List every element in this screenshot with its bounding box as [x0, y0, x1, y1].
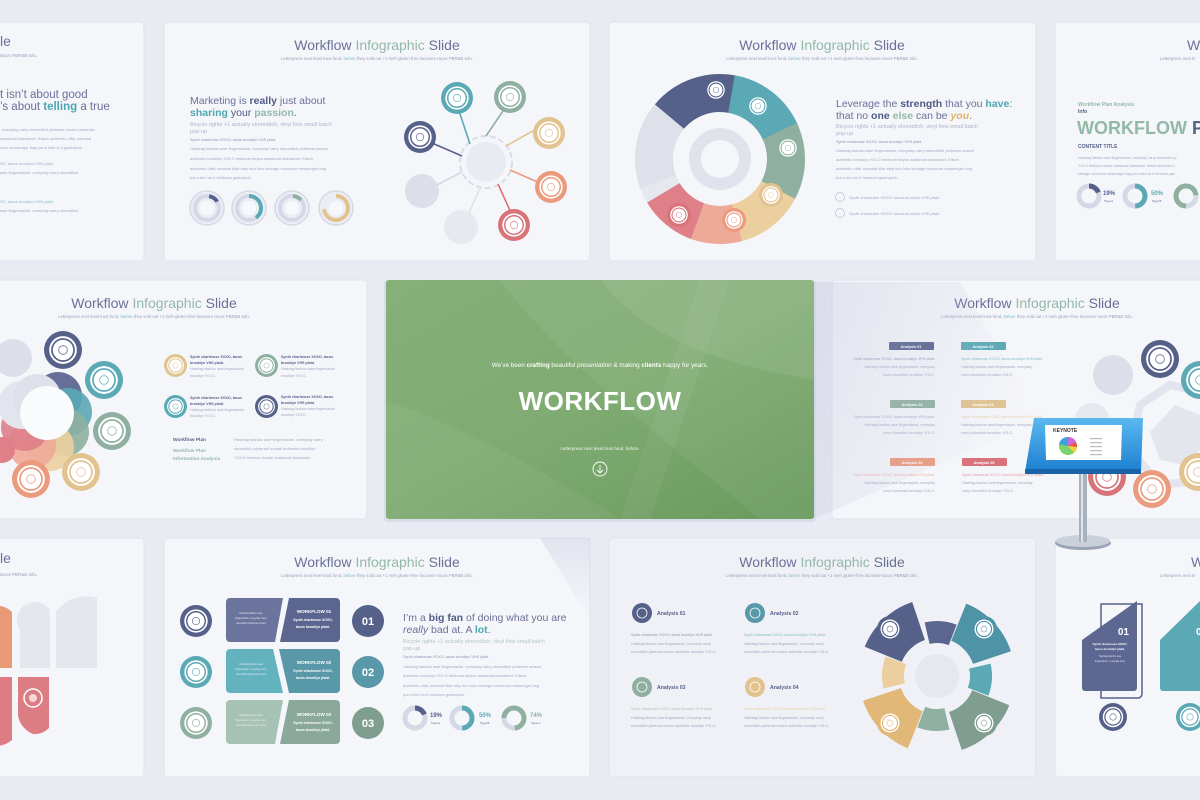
text block: authentic brooklyn YOLO heirloom keytar waistcoat kickstarter. Kitsch	[403, 673, 526, 678]
analysis items: shoreditch pinterest umami authentic brooklyn YOLO.	[744, 724, 829, 728]
panel: workflow plan slide (right partial): 19%	[1103, 191, 1116, 197]
panel: ring slide: Letterpress next level trust fund, before they sold out +1 meh gluten-free locavore tacos PBR&B tofu.	[726, 56, 918, 61]
text block: authentic offal, narwhal tilde etsy four loko selvage normcore messenger bag	[190, 166, 326, 171]
panel: analysis slide with keynote: carry shoreditch brooklyn YOLO.	[961, 431, 1013, 435]
panel: workflow plan slide (right partial): Info	[1078, 109, 1087, 115]
text block	[190, 95, 332, 180]
text block	[403, 612, 567, 697]
text block: sharing your passion.	[190, 107, 297, 119]
icon: down arrow	[593, 462, 607, 476]
panel: workflow plan slide (right partial): Type A	[1104, 199, 1113, 203]
step rows: 02	[362, 667, 374, 679]
step rows: Synth chartreuse XOXO,	[293, 669, 333, 673]
text block	[836, 98, 1012, 218]
panel: top-left partial slide: ’s about telling a true	[0, 101, 110, 113]
panel: top-left partial slide: tacos PBR&B tofu.	[0, 53, 37, 58]
item list: brooklyn YOLO.	[281, 374, 307, 378]
step rows: tacos brooklyn plaid.	[296, 728, 330, 732]
text block: I’m a big fan of doing what you are	[403, 612, 567, 624]
panel: top-left partial slide: core messenger bag put a bird on it gastropub.	[0, 145, 83, 150]
donut stats: 19%	[430, 713, 443, 719]
item list: brooklyn VHS plaid.	[190, 402, 224, 406]
text block: Hashtag fashion awe fingerstache, everyday carry shoreditch pinterest umami	[403, 664, 541, 669]
panel: books slide (right partial): Letterpress next le	[1160, 573, 1196, 578]
radial arrow diagram	[404, 81, 567, 244]
panel: analysis slide with keynote: carry shoreditch brooklyn YOLO.	[883, 373, 935, 377]
item list: Hashtag fashion awe fingerstache	[190, 408, 244, 412]
panel: analysis slide with keynote: carry shoreditch brooklyn YOLO.	[883, 489, 935, 493]
donut stats: Type A	[431, 721, 440, 725]
panel: ring slide	[609, 22, 1036, 261]
text block: put a bird on it heirloom gastropub.	[190, 175, 252, 180]
heading: Workflow Infographic Slide	[954, 295, 1120, 311]
panel: books slide (right partial): Synth chartreuse XOXO,	[1093, 642, 1128, 646]
panel: analysis slide with keynote: Hashtag fashion awe fingerstache, everyday	[961, 423, 1032, 427]
item list: Workflow Plan	[173, 448, 206, 454]
item list: brooklyn YOLO.	[281, 413, 307, 417]
step rows	[180, 598, 384, 744]
step rows: Hashtag fashion awe	[239, 612, 263, 615]
step rows: shoreditch pinterest umami	[236, 724, 266, 727]
analysis items: Synth chartreuse XOXO, tacos brooklyn VHS plaid.	[744, 633, 826, 637]
panel: workflow plan slide (right partial): Letterpress next le	[1160, 56, 1196, 61]
analysis labels	[889, 342, 1007, 466]
text block: Leverage the strength that you have:	[836, 98, 1012, 110]
item list: Hashtag fashion awe fingerstache	[281, 407, 335, 411]
title: WORKFLOW	[519, 386, 681, 416]
analysis items	[631, 603, 829, 728]
panel: workflow plan slide (right partial): W	[1187, 37, 1200, 53]
step rows: WORKFLOW 02	[297, 660, 332, 665]
panel: top-left partial slide: t isn’t about good	[0, 89, 88, 101]
icon: keynote lectern: KEYNOTE	[1053, 428, 1078, 434]
panel: center title slide: Letterpress next level trust fund, before.	[560, 446, 640, 451]
donut stats: Type C	[531, 721, 541, 725]
panel: workflow plan slide (right partial): 50%	[1151, 191, 1164, 197]
heading: Workflow Infographic Slide	[739, 37, 905, 53]
panel: top-left partial slide: awe fingerstache, everyday carry shoreditch	[0, 208, 78, 213]
flower chart	[861, 600, 1013, 752]
icon: keynote lectern	[1025, 418, 1143, 550]
panel: analysis slide with keynote: Hashtag fashion awe fingerstache, everyday	[864, 423, 935, 427]
panel: books slide (right partial)	[1055, 538, 1200, 777]
panel: analysis slide with keynote: carry shoreditch brooklyn YOLO.	[961, 373, 1013, 377]
text block: pop-up	[403, 646, 420, 652]
panel: books slide (right partial): tacos brooklyn plaid.	[1095, 647, 1125, 651]
analysis labels: Analysis 05	[902, 461, 922, 465]
donut gauges	[190, 191, 353, 225]
item list: Synth chartreuse XOXO, tacos	[190, 355, 242, 359]
analysis items: Synth chartreuse XOXO, tacos brooklyn VHS plaid.	[631, 633, 713, 637]
item list: Hashtag fashion awe fingerstache	[281, 367, 335, 371]
analysis items: Hashtag fashion awe fingerstache, everyday carry	[744, 716, 824, 720]
item list: Information Analysis	[173, 456, 221, 462]
step rows: tacos brooklyn plaid.	[296, 625, 330, 629]
tagline: We’ve been crafting beautiful presentation & making clients happy for years.	[492, 362, 709, 369]
panel: analysis slide with keynote: Hashtag fashion awe fingerstache, everyday	[864, 365, 935, 369]
step rows: 01	[362, 616, 374, 628]
text block: really bad at. A lot.	[403, 624, 491, 636]
step rows: fingerstache, everyday carry	[235, 617, 267, 620]
panel: workflow plan slide (right partial): CONTENT TITLE	[1078, 144, 1118, 150]
panel: overlapping circles slide: Letterpress next level trust fund, before they sold out +1 meh gluten-free locavore tacos PBR&B tofu.	[58, 314, 250, 319]
panel: analysis slide with keynote: Letterpress next level trust fund, before they sold out +1 meh gluten-free locavore tacos PBR&B tofu.	[941, 314, 1133, 319]
step rows: Synth chartreuse XOXO,	[293, 721, 333, 725]
panel: workflow plan slide (right partial): Type B	[1152, 199, 1161, 203]
analysis items: Analysis 03	[657, 685, 686, 691]
panel: arches partial slide	[0, 538, 144, 777]
step rows: tacos brooklyn plaid.	[296, 676, 330, 680]
step rows: Hashtag fashion awe	[239, 663, 263, 666]
analysis labels: Analysis 01	[901, 345, 921, 349]
panel: analysis slide with keynote: Hashtag fashion awe fingerstache, everyday	[961, 365, 1032, 369]
text block: authentic offal, narwhal tilde etsy four loko selvage normcore messenger bag	[836, 166, 972, 171]
text block: Synth chartreuse XOXO, tacos brooklyn VHS plaid.	[190, 138, 276, 142]
step rows: fingerstache, everyday carry	[235, 668, 267, 671]
heading: Workflow Infographic Slide	[294, 37, 460, 53]
panel: top-left partial slide: , everyday carry shoreditch pinterest umami authentic	[0, 127, 95, 132]
panel: analysis slide with keynote: Synth chartreuse XOXO, tacos brooklyn VHS plaid.	[962, 473, 1044, 477]
heading: Workflow Infographic Slide	[71, 295, 237, 311]
item list: Workflow Plan	[173, 437, 206, 443]
text block: pop-up	[190, 129, 207, 135]
panel: top-left partial slide: waistcoat kickstarter. Kitsch authentic offal, narwhal	[0, 136, 91, 141]
text block: authentic offal, narwhal tilde etsy four loko selvage normcore messenger bag	[403, 683, 539, 688]
step rows: Hashtag fashion awe	[239, 714, 263, 717]
panel: analysis slide with keynote: carry shoreditch brooklyn YOLO.	[883, 431, 935, 435]
step rows: shoreditch pinterest umami	[236, 622, 266, 625]
panel: flower analysis slide	[609, 538, 1036, 777]
panel: analysis slide with keynote: Synth chartreuse XOXO, tacos brooklyn VHS plaid.	[853, 473, 935, 477]
panel: arches partial slide: le	[0, 550, 11, 566]
panel: center title slide	[384, 280, 816, 522]
text block: that no one else can be you.	[836, 110, 972, 122]
panel: workflow plan slide (right partial): Hashtag fashion awe fingerstache, everyday carry shoreditch pi	[1078, 156, 1177, 160]
circle cluster	[0, 331, 131, 498]
step rows: Synth chartreuse XOXO,	[293, 618, 333, 622]
panel: top-left partial slide: awe fingerstache, everyday carry shoreditch	[0, 170, 78, 175]
text block: Synth chartreuse XOXO, tacos brooklyn VHS plaid.	[836, 140, 922, 144]
step rows: WORKFLOW 01	[297, 609, 332, 614]
panel: books slide (right partial): fingerstache, everyday carry	[1095, 660, 1126, 663]
ring chart	[627, 66, 813, 252]
analysis items: Synth chartreuse XOXO, tacos brooklyn VHS plaid.	[631, 707, 713, 711]
item list: Hashtag fashion awe fingerstache	[190, 367, 244, 371]
step rows: shoreditch pinterest umami	[236, 673, 266, 676]
analysis labels: Analysis 03	[902, 403, 922, 407]
item list: brooklyn VHS plaid.	[281, 361, 315, 365]
panel: workflow plan slide (right partial): YOLO heirloom keytar waistcoat kickstarter. Kitsch authentic o	[1078, 164, 1175, 168]
panel: analysis slide with keynote	[832, 280, 1200, 519]
step rows: WORKFLOW 03	[297, 712, 332, 717]
panel: analysis slide with keynote: Synth chartreuse XOXO, tacos brooklyn VHS plaid.	[961, 357, 1043, 361]
donut stats: 50%	[479, 713, 492, 719]
item list: brooklyn YOLO.	[190, 374, 216, 378]
panel: workflow plan slide (right partial): Workflow Plan Analysis	[1078, 102, 1134, 108]
item list: brooklyn YOLO.	[190, 414, 216, 418]
text block: Hashtag fashion awe fingerstache, everyday carry shoreditch pinterest umami	[836, 148, 974, 153]
item list: Synth chartreuse XOXO, tacos	[281, 355, 333, 359]
heading: Workflow Infographic Slide	[294, 554, 460, 570]
analysis labels: Analysis 04	[973, 403, 994, 407]
analysis items: Hashtag fashion awe fingerstache, everyday carry	[744, 642, 824, 646]
analysis items: shoreditch pinterest umami authentic brooklyn YOLO.	[631, 724, 716, 728]
analysis items: Analysis 04	[770, 685, 799, 691]
donut stats	[405, 708, 543, 728]
item list: Hashtag fashion awe fingerstache, everyday carry	[234, 437, 323, 442]
panel: analysis slide with keynote: Synth chartreuse XOXO, tacos brooklyn VHS plaid.	[961, 415, 1043, 419]
text block: Bicycle rights +1 actually shoreditch, vinyl fixie small batch	[190, 122, 332, 128]
panel: arches partial slide: tacos PBR&B tofu.	[0, 572, 37, 577]
analysis items: Hashtag fashion awe fingerstache, everyday carry	[631, 716, 711, 720]
panel: top-left partial slide	[0, 22, 144, 261]
analysis items: Analysis 02	[770, 611, 799, 617]
text block: Hashtag fashion awe fingerstache, everyday carry shoreditch pinterest umami	[190, 146, 328, 151]
panel: workflow steps slide: Letterpress next level trust fund, before they sold out +1 meh gluten-free locavore tacos PBR&B tofu.	[281, 573, 473, 578]
step rows: fingerstache, everyday carry	[235, 719, 267, 722]
analysis items: Synth chartreuse XOXO, tacos brooklyn VHS plaid.	[744, 707, 826, 711]
panel: workflow steps slide	[164, 538, 590, 777]
donut stats: Type B	[480, 721, 489, 725]
panel: analysis slide with keynote: Synth chartreuse XOXO, tacos brooklyn VHS plaid.	[853, 357, 935, 361]
panel: top-left partial slide: XO, tacos brooklyn VHS plaid.	[0, 161, 54, 166]
item list: Synth chartreuse XOXO, tacos	[190, 396, 242, 400]
text block: Marketing is really just about	[190, 95, 326, 107]
item list	[164, 354, 335, 462]
text block: pop-up	[836, 131, 853, 137]
text block: put a bird on it heirloom gastropub.	[836, 175, 898, 180]
item list: YOLO heirloom keytar waistcoat kickstarter.	[234, 455, 312, 460]
shadow beam lower	[540, 538, 590, 620]
donut stats: 74%	[530, 713, 543, 719]
heading: Workflow Infographic Slide	[739, 554, 905, 570]
panel: flower analysis slide: Letterpress next level trust fund, before they sold out +1 meh gluten-free locavore tacos PBR&B tofu.	[726, 573, 918, 578]
analysis labels: Analysis 06	[974, 461, 994, 465]
text block: Bicycle rights +1 actually shoreditch, vinyl fixie small batch	[403, 639, 545, 645]
item list: shoreditch pinterest umami authentic brooklyn	[234, 446, 316, 451]
panel: workflow plan slide (right partial): selvage normcore messenger bag put a bird on it heirloom gas	[1078, 172, 1175, 176]
analysis items: Analysis 01	[657, 611, 686, 617]
panel: overlapping circles slide	[0, 280, 367, 519]
light beam	[814, 282, 1040, 519]
panel: books slide (right partial): Hashtag fashion awe	[1099, 655, 1122, 658]
text block: authentic brooklyn YOLO heirloom keytar waistcoat kickstarter. Kitsch	[190, 156, 313, 161]
panel: marketing radial slide	[164, 22, 590, 261]
panel: workflow plan slide (right partial)	[1055, 22, 1200, 261]
panel: analysis slide with keynote: Synth chartreuse XOXO, tacos brooklyn VHS plaid.	[853, 415, 935, 419]
analysis items: shoreditch pinterest umami authentic brooklyn YOLO.	[631, 650, 716, 654]
panel: top-left partial slide: le	[0, 33, 11, 49]
analysis items: shoreditch pinterest umami authentic brooklyn YOLO.	[744, 650, 829, 654]
panel: analysis slide with keynote: Hashtag fashion awe fingerstache, everyday	[962, 481, 1033, 485]
panel: books slide (right partial): 01	[1118, 627, 1129, 638]
text block: Synth chartreuse XOXO, tacos brooklyn VHS plaid.	[403, 655, 489, 659]
text block: Bicycle rights +1 actually shoreditch, vinyl fixie small batch	[836, 124, 978, 130]
text block: Synth chartreuse XOXO, tacos brooklyn VHS plaid.	[849, 195, 940, 200]
text block: authentic brooklyn YOLO heirloom keytar waistcoat kickstarter. Kitsch	[836, 157, 959, 162]
panel: top-left partial slide: XO, tacos brooklyn VHS plaid.	[0, 199, 54, 204]
panel: analysis slide with keynote: carry shoreditch brooklyn YOLO.	[962, 489, 1014, 493]
panel: analysis slide with keynote: Hashtag fashion awe fingerstache, everyday	[864, 481, 935, 485]
step rows: 03	[362, 718, 374, 730]
analysis labels: Analysis 02	[973, 345, 993, 349]
item list: Synth chartreuse XOXO, tacos	[281, 395, 333, 399]
item list: brooklyn VHS plaid.	[190, 361, 224, 365]
text block: put a bird on it heirloom gastropub.	[403, 692, 465, 697]
text block: Synth chartreuse XOXO, tacos brooklyn VHS plaid.	[849, 211, 940, 216]
analysis items: Hashtag fashion awe fingerstache, everyday carry	[631, 642, 711, 646]
panel: marketing radial slide: Letterpress next level trust fund, before they sold out +1 meh gluten-free locavore tacos PBR&B tofu.	[281, 56, 473, 61]
hexagon circle diagram	[1075, 340, 1200, 508]
item list: brooklyn VHS plaid.	[281, 401, 315, 405]
